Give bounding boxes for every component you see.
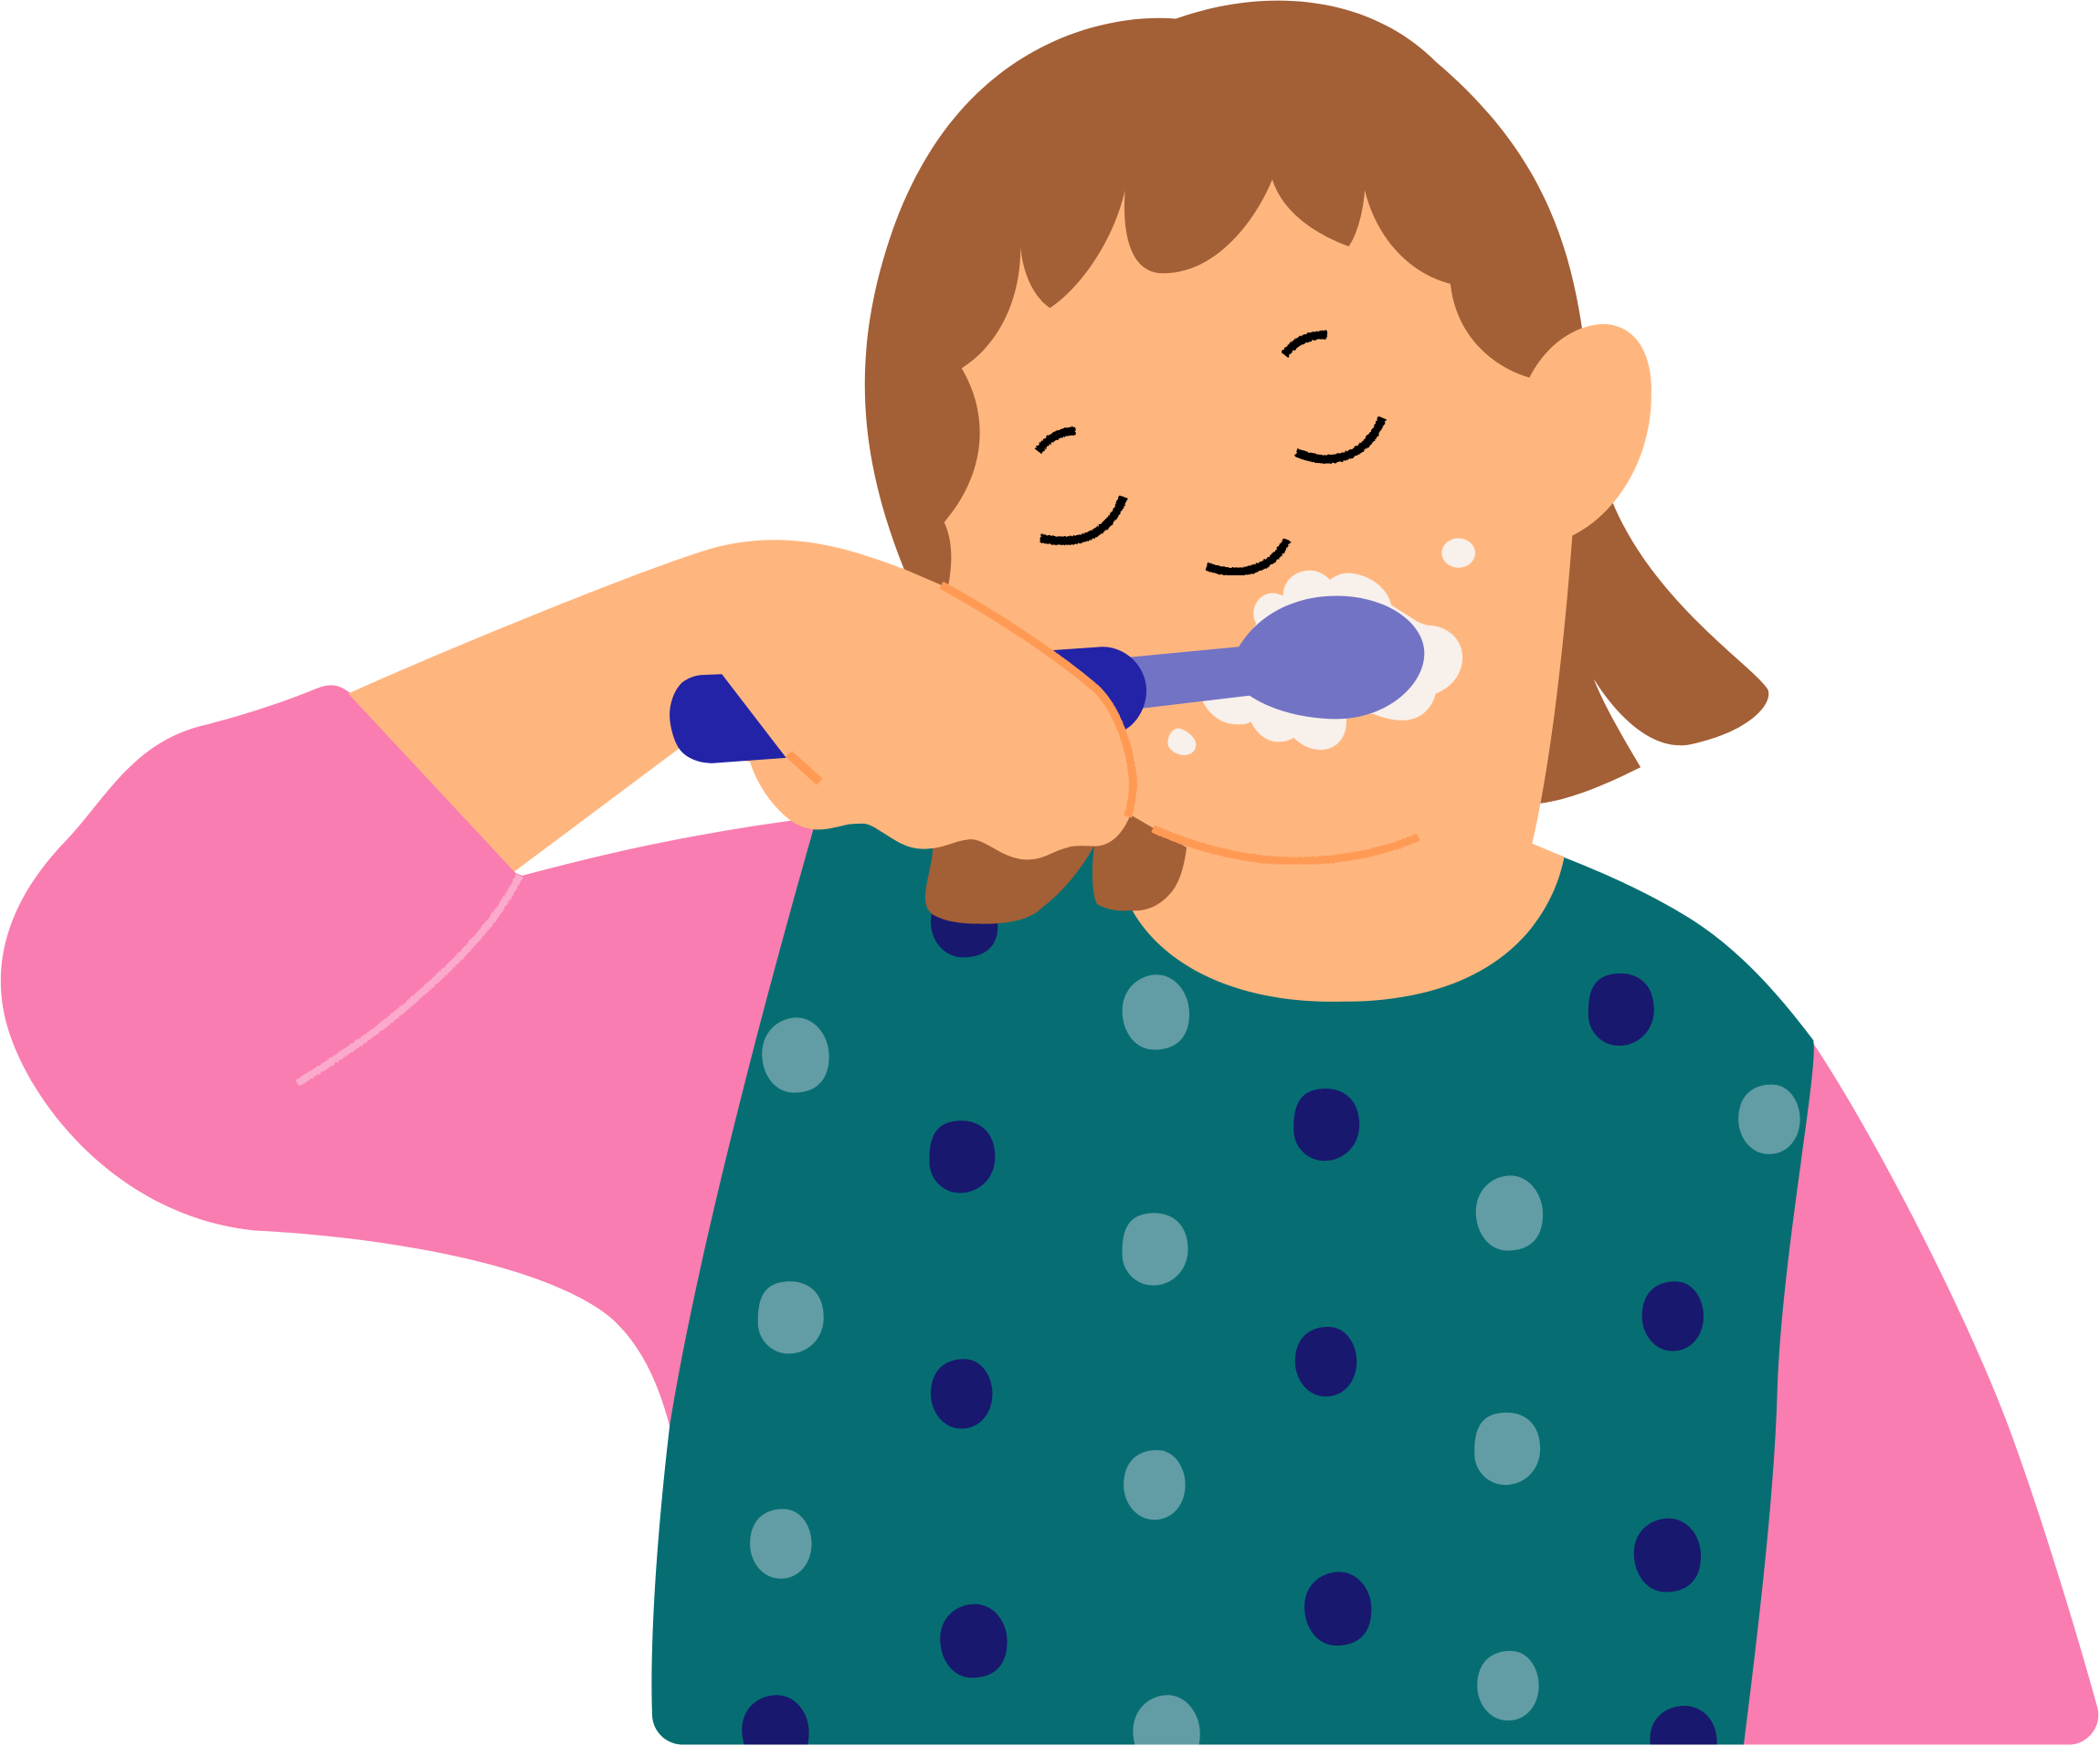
- toothbrush neck dark: [1045, 647, 1146, 730]
- toothbrush: [1045, 595, 1424, 730]
- hand and forearm: [348, 540, 1135, 872]
- face, ear and neck: [944, 179, 1652, 1002]
- foam: [1168, 538, 1475, 755]
- hand outline: [942, 585, 1133, 816]
- foam speck upper: [1441, 538, 1475, 568]
- right sleeve: [1727, 1014, 2098, 1745]
- toothbrush stem: [1045, 647, 1259, 714]
- toothbrush head: [1235, 595, 1424, 719]
- mouth: [1207, 540, 1287, 572]
- eyebrows: [1038, 335, 1327, 451]
- sleeve cuff line: [297, 876, 520, 1083]
- hair locks under hand: [925, 815, 1187, 924]
- closed eyes: [1040, 417, 1382, 541]
- light dots: [750, 974, 1800, 1746]
- shirt dots: [742, 889, 1800, 1746]
- hair back: [865, 1, 1768, 804]
- navy dots: [742, 889, 1717, 1746]
- shirt: [651, 804, 1814, 1745]
- toothbrush handle: [670, 674, 786, 763]
- left arm sleeve: [1, 685, 830, 1473]
- chin line: [1153, 829, 1419, 861]
- finger line: [789, 754, 819, 782]
- foam speck lower: [1168, 729, 1196, 755]
